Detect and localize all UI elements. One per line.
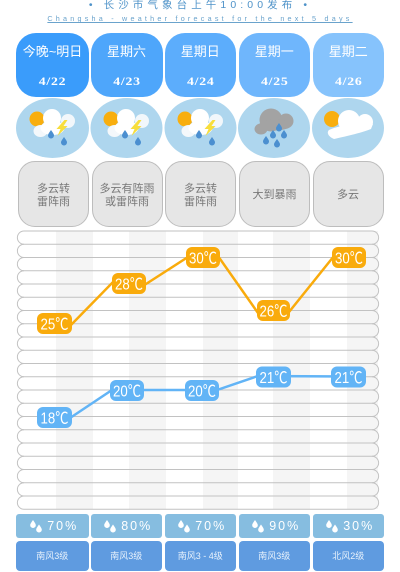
icon: day 2 thunderstorm [90, 98, 162, 158]
wind day 3 [164, 541, 236, 571]
label 20℃ day 2: 20℃ [113, 384, 141, 400]
header day 5 [312, 33, 384, 97]
low temperature series [37, 366, 366, 428]
header day 3 [164, 33, 236, 97]
wind day 5: 北风2级 [332, 551, 364, 561]
subtitle: Changsha - weather forecast for the next 5 days [47, 14, 353, 23]
label 30℃ day 3: 30℃ [189, 250, 217, 268]
panel: rain probability [16, 514, 384, 538]
label 26℃ [257, 300, 290, 321]
header day 2 [90, 33, 162, 97]
wind day 5 [312, 541, 384, 571]
panel: wind [16, 541, 384, 571]
icon: day 4 heavy rain [238, 98, 310, 158]
high temperature series [37, 247, 366, 334]
rain day 1: 70% [47, 518, 78, 532]
label 21℃ day 4: 21℃ [260, 370, 288, 387]
header day 1: 今晚~明日 [23, 44, 82, 59]
label 30℃ day 5 [332, 247, 366, 268]
rain day 1 [16, 514, 88, 538]
weather icons [16, 98, 384, 158]
condition day 4: 大到暴雨 [252, 189, 296, 201]
wind day 4: 南风3级 [258, 551, 290, 561]
header day 1 [16, 33, 89, 97]
condition day 5: 多云 [337, 189, 359, 201]
label 28℃ [112, 273, 146, 294]
label 26℃: 26℃ [260, 304, 288, 320]
label 21℃ day 5 [331, 366, 366, 388]
label 18℃ [37, 407, 72, 428]
label 28℃: 28℃ [115, 276, 143, 294]
header day 2: 4/23 [113, 76, 140, 88]
label 20℃ day 3: 20℃ [188, 384, 216, 400]
header day 4: 星期一 [255, 44, 294, 59]
wind day 4 [238, 541, 310, 571]
rain day 4 [238, 514, 310, 538]
condition day 2: 多云有阵雨 [100, 182, 154, 194]
icons: rain drops [30, 520, 338, 532]
wind day 1 [16, 541, 88, 571]
rain day 2: 80% [121, 518, 152, 532]
rain day 2 [90, 514, 162, 538]
condition day 3: 雷阵雨 [184, 196, 217, 208]
rain day 5 [312, 514, 384, 538]
label 21℃ day 5: 21℃ [334, 370, 362, 387]
condition day 1: 雷阵雨 [37, 196, 70, 208]
rain day 3: 70% [195, 518, 226, 532]
condition day 1: 多云转 [37, 182, 70, 194]
wind day 2 [90, 541, 162, 571]
condition day 5 [312, 161, 384, 227]
panel: day headers [16, 33, 384, 97]
label 25℃ [37, 313, 72, 334]
header day 1: 4/22 [39, 76, 66, 88]
rain day 5: 30% [343, 518, 374, 532]
label 20℃ day 3 [185, 380, 219, 401]
label 30℃ day 5: 30℃ [335, 250, 363, 268]
icon: day 5 cloudy [312, 98, 384, 158]
icon: day 1 thunderstorm [16, 98, 89, 158]
header day 3: 星期日 [181, 44, 220, 59]
wind day 1: 南风3级 [36, 551, 68, 561]
condition day 4 [239, 161, 310, 227]
header day 3: 4/24 [187, 76, 214, 88]
condition day 2 [92, 161, 162, 227]
label 18℃: 18℃ [40, 410, 68, 428]
header day 5: 4/26 [335, 76, 362, 88]
header day 5: 星期二 [329, 44, 368, 59]
header day 4 [238, 33, 310, 97]
label 21℃ day 4 [256, 366, 291, 388]
panel: conditions [18, 161, 384, 227]
label 25℃: 25℃ [40, 316, 68, 334]
condition day 3: 多云转 [184, 182, 217, 194]
rain day 4: 90% [269, 518, 300, 532]
header day 4: 4/25 [261, 76, 288, 88]
header day 2: 星期六 [107, 44, 146, 59]
condition day 2: 或雷阵雨 [105, 196, 149, 208]
condition day 1 [18, 161, 89, 227]
wind day 3: 南风3 - 4级 [178, 551, 223, 561]
icon: day 3 thunderstorm [164, 98, 236, 158]
label 20℃ day 2 [110, 380, 144, 401]
rain day 3 [164, 514, 236, 538]
condition day 3 [165, 161, 236, 227]
wind day 2: 南风3级 [110, 551, 142, 561]
label 30℃ day 3 [186, 247, 220, 268]
